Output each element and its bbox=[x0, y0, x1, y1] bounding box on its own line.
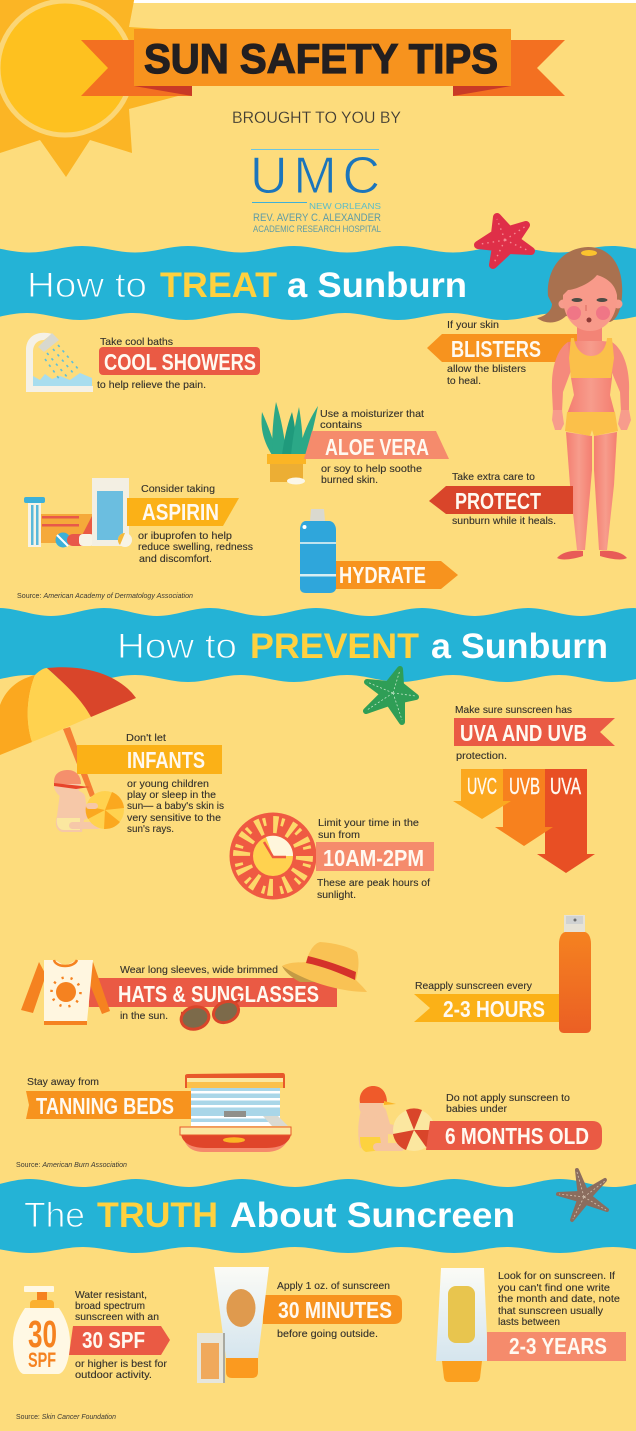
tip: infants: very sensitive to the bbox=[127, 812, 221, 824]
tip: protect: PROTECT bbox=[455, 488, 541, 514]
icon: sun bbox=[0, 0, 178, 177]
icon: pump bottle bbox=[13, 1286, 70, 1374]
panel: how to prevent a sunburn bbox=[0, 608, 636, 1169]
illustration: sunburned woman bbox=[537, 247, 631, 559]
tip: cool showers: Take cool baths bbox=[100, 336, 173, 348]
tip: six months: Do not apply sunscreen to bbox=[446, 1092, 570, 1104]
icon: pills, box and water glass bbox=[24, 478, 132, 548]
tip: hats and sunglasses: Wear long sleeves, wide brimmed bbox=[120, 964, 278, 976]
tip: six months: 6 MONTHS OLD bbox=[445, 1123, 589, 1149]
tip: aspirin bbox=[24, 478, 253, 565]
tip: infants bbox=[54, 732, 224, 835]
tip: 2-3 years: the month and date, note bbox=[498, 1293, 620, 1305]
tip: hydrate bbox=[300, 509, 458, 593]
tip: 30 spf bbox=[13, 1286, 170, 1381]
tip: infants: play or sleep in the bbox=[127, 789, 216, 801]
tip: 30 spf: 30 SPF bbox=[82, 1327, 145, 1353]
icon: green starfish bbox=[366, 669, 416, 722]
arrows: uv rays: UVC bbox=[467, 773, 497, 799]
logo: UMC: ACADEMIC RESEARCH HOSPITAL bbox=[253, 224, 381, 234]
tip: aspirin: or ibuprofen to help bbox=[138, 530, 232, 542]
tip: 30 minutes: before going outside. bbox=[277, 1328, 378, 1340]
logo: UMC: NEW ORLEANS bbox=[309, 201, 381, 211]
icon: shower bbox=[26, 333, 93, 392]
tip: peak hours: sun from bbox=[318, 829, 360, 841]
tip: peak hours: 10AM-2PM bbox=[323, 845, 424, 871]
icon: pump bottle: SPF bbox=[28, 1349, 56, 1372]
tip: 30 minutes bbox=[197, 1267, 402, 1383]
source note: Source: American Academy of Dermatology Association bbox=[17, 593, 193, 600]
panel: the truth about sunscreen bbox=[0, 1170, 636, 1421]
tip: tanning beds: Stay away from bbox=[27, 1076, 99, 1088]
heading bbox=[117, 627, 608, 666]
tip: aloe vera bbox=[261, 402, 449, 486]
tip: aloe vera: contains bbox=[320, 419, 362, 431]
tip: reapply sunscreen bbox=[414, 915, 591, 1033]
tip: hydrate: HYDRATE bbox=[339, 562, 426, 588]
panel: how to treat a sunburn bbox=[0, 217, 636, 600]
heading: TREAT bbox=[160, 266, 277, 305]
heading: How to bbox=[27, 266, 147, 305]
tip: reapply sunscreen: Reapply sunscreen every bbox=[415, 980, 533, 992]
heading: The bbox=[24, 1196, 85, 1235]
icon: beach umbrella bbox=[0, 667, 136, 797]
tip: protect: sunburn while it heals. bbox=[452, 515, 556, 527]
icon: sunglasses bbox=[179, 997, 242, 1032]
tip: 2-3 years: 2-3 YEARS bbox=[509, 1333, 607, 1359]
icon: sun clock bbox=[230, 812, 316, 900]
tip: uva and uvb: UVA AND UVB bbox=[460, 720, 587, 746]
icon: sunscreen tube and glass bbox=[197, 1267, 269, 1383]
tip: peak hours: Limit your time in the bbox=[318, 817, 419, 829]
tip: aspirin: ASPIRIN bbox=[142, 499, 219, 525]
wave band bbox=[0, 246, 636, 320]
icon: baby with beach ball bbox=[54, 770, 124, 832]
icon: brown starfish bbox=[558, 1170, 607, 1220]
tip: blisters bbox=[427, 319, 585, 387]
tip: uva and uvb bbox=[453, 704, 615, 873]
tip: tanning beds bbox=[26, 1073, 291, 1152]
tip: peak hours: sunlight. bbox=[317, 889, 356, 901]
arrows: uv rays: UVA bbox=[550, 773, 581, 799]
tip: infants: Don't let bbox=[126, 732, 166, 744]
tip: aloe vera: ALOE VERA bbox=[325, 434, 429, 460]
tip: infants: INFANTS bbox=[127, 747, 205, 773]
wave band bbox=[0, 1179, 636, 1253]
tip: 2-3 years: that sunscreen usually bbox=[498, 1305, 604, 1317]
heading bbox=[24, 1196, 515, 1235]
tip: infants: or young children bbox=[127, 778, 209, 790]
icon: baby with beach ball bbox=[358, 1086, 435, 1152]
tip: blisters: to heal. bbox=[447, 375, 481, 387]
tip: blisters: If your skin bbox=[447, 319, 499, 331]
tip: 30 spf: sunscreen with an bbox=[75, 1311, 159, 1323]
title text: SUN SAFETY TIPS bbox=[144, 35, 498, 82]
tip: aspirin: Consider taking bbox=[141, 483, 215, 495]
title ribbon bbox=[81, 29, 565, 96]
heading: TRUTH bbox=[97, 1196, 218, 1235]
tip: peak hours: These are peak hours of bbox=[317, 877, 430, 889]
tip: cool showers bbox=[26, 333, 260, 392]
arrows: uv rays: UVB bbox=[509, 773, 540, 799]
tip: uva and uvb: protection. bbox=[456, 750, 507, 762]
tip: hats and sunglasses: in the sun. bbox=[120, 1010, 168, 1022]
tip: infants: sun— a baby's skin is bbox=[127, 800, 224, 812]
tip: blisters: allow the blisters bbox=[447, 363, 526, 375]
tip: cool showers: to help relieve the pain. bbox=[97, 379, 206, 391]
tip: infants: sun's rays. bbox=[127, 823, 174, 835]
source note: Source: Skin Cancer Foundation bbox=[16, 1414, 116, 1421]
byline: BROUGHT TO YOU BY bbox=[232, 109, 401, 127]
tip: tanning beds: TANNING BEDS bbox=[36, 1093, 174, 1119]
tip: 30 spf: broad spectrum bbox=[75, 1300, 145, 1312]
heading: PREVENT bbox=[250, 627, 419, 666]
icon: aloe plant bbox=[261, 402, 318, 484]
logo: UMC: UMC bbox=[250, 147, 380, 205]
logo: UMC bbox=[250, 147, 381, 234]
source note: Source: American Burn Association bbox=[16, 1162, 127, 1169]
icon: sun hat bbox=[282, 942, 367, 992]
logo: UMC: REV. AVERY C. ALEXANDER bbox=[253, 212, 381, 224]
icon: red starfish bbox=[478, 217, 531, 265]
tip: six months: babies under bbox=[446, 1103, 508, 1115]
icon: pump bottle: 30 bbox=[28, 1314, 57, 1356]
tip: reapply sunscreen: 2-3 HOURS bbox=[443, 996, 545, 1022]
heading: How to bbox=[117, 627, 237, 666]
wave band bbox=[0, 608, 636, 682]
heading: a Sunburn bbox=[431, 627, 608, 666]
tip: six months bbox=[358, 1086, 602, 1152]
tip: cool showers: COOL SHOWERS bbox=[104, 349, 256, 375]
tip: blisters: BLISTERS bbox=[451, 336, 541, 362]
tip: peak hours bbox=[230, 812, 434, 901]
tip: 2-3 years: you can't find one write bbox=[498, 1282, 610, 1294]
tip: aspirin: reduce swelling, redness bbox=[138, 541, 253, 553]
tip: hats and sunglasses: HATS & SUNGLASSES bbox=[118, 981, 319, 1007]
tip: 2-3 years: Look for on sunscreen. If bbox=[498, 1270, 615, 1282]
icon: long-sleeve shirt bbox=[21, 960, 110, 1025]
tip: hats and sunglasses bbox=[21, 942, 367, 1032]
icon: water bottle bbox=[300, 509, 336, 593]
tip: aloe vera: Use a moisturizer that bbox=[320, 408, 424, 420]
tip: protect: Take extra care to bbox=[452, 471, 535, 483]
tip: uva and uvb: Make sure sunscreen has bbox=[455, 704, 572, 716]
icon: spray can bbox=[559, 915, 591, 1033]
icon: tanning bed bbox=[180, 1073, 291, 1152]
tip: 30 minutes: 30 MINUTES bbox=[278, 1297, 392, 1323]
tip: aloe vera: burned skin. bbox=[321, 474, 378, 486]
icon: sunscreen tube bbox=[436, 1268, 488, 1382]
tip: 2-3 years: lasts between bbox=[498, 1316, 560, 1328]
heading: About Suncreen bbox=[230, 1196, 515, 1235]
tip: 30 spf: outdoor activity. bbox=[75, 1369, 152, 1381]
tip: 30 spf: or higher is best for bbox=[75, 1358, 167, 1370]
tip: aloe vera: or soy to help soothe bbox=[321, 463, 422, 475]
arrows: uv rays bbox=[453, 769, 595, 873]
tip: 30 minutes: Apply 1 oz. of sunscreen bbox=[277, 1280, 390, 1292]
tip: 2-3 years bbox=[436, 1268, 626, 1382]
heading: a Sunburn bbox=[287, 266, 467, 305]
tip: protect bbox=[429, 471, 573, 527]
heading bbox=[27, 266, 467, 305]
tip: 30 spf: Water resistant, bbox=[75, 1289, 147, 1301]
tip: aspirin: and discomfort. bbox=[139, 553, 212, 565]
banner bbox=[263, 1295, 402, 1324]
